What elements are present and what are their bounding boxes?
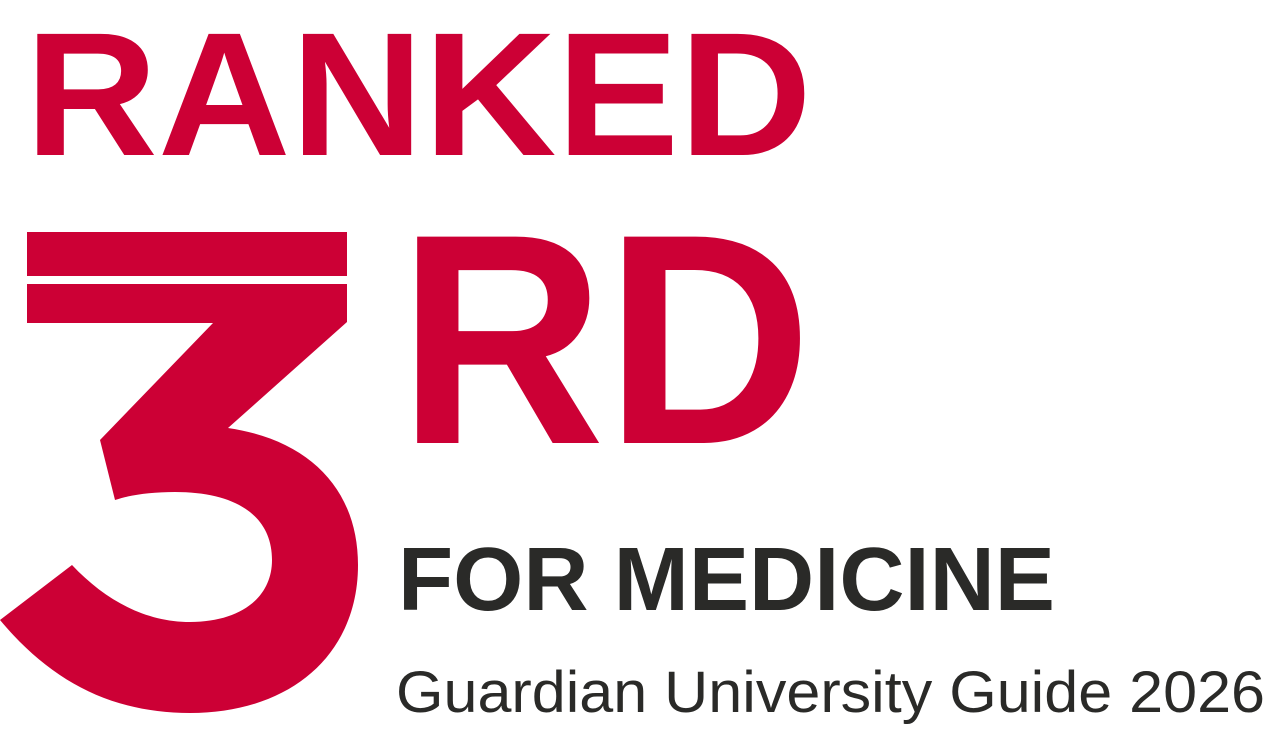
heading: RANKED: RANKED xyxy=(25,0,812,193)
source: Guardian University Guide 2026: Guardian University Guide 2026 xyxy=(396,660,1265,725)
subheading: FOR MEDICINE: FOR MEDICINE xyxy=(398,530,1055,630)
big numeral 3 xyxy=(0,232,358,713)
ordinal suffix: RD: RD xyxy=(398,171,812,507)
